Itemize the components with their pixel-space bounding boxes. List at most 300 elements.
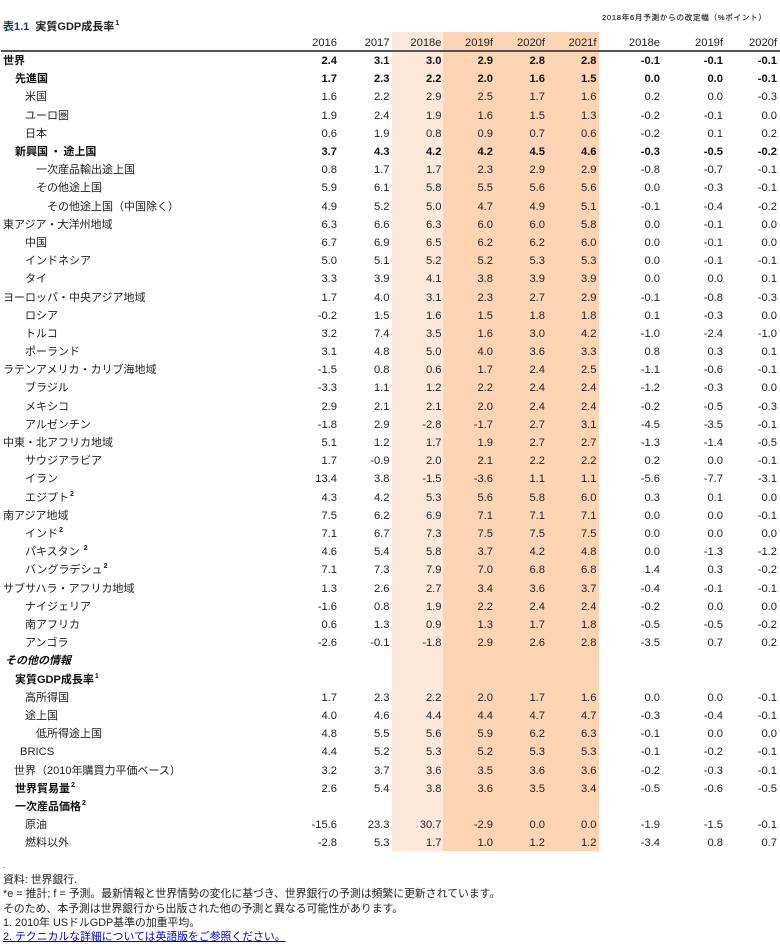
row: 新興国・途上国: 4.3 (374, 146, 390, 158)
row: エジプト: 0.0 (761, 492, 777, 504)
row: 高所得国: 1.7 (529, 692, 545, 704)
row: 世界（2010年購買力平価ベース）: 3.6 (581, 764, 596, 776)
row: ユーロ圏: 2.4 (374, 110, 390, 122)
footnotes (0, 861, 780, 944)
row: 世界貿易量: -0.5 (641, 783, 660, 795)
row: ヨーロッパ・中央アジア地域: 2.7 (529, 292, 545, 304)
row: 中東・北アフリカ地域: -1.4 (704, 437, 723, 449)
row: タイ: 0.1 (761, 273, 777, 285)
row: 一次産品輸出途上国 (36, 164, 777, 176)
row: アルゼンチン: 3.1 (581, 419, 596, 431)
row: BRICS (0, 743, 780, 761)
row: メキシコ: 2.0 (477, 401, 493, 413)
row: サウジアラビア: -0.1 (758, 455, 777, 467)
row: サブサハラ・アフリカ地域: -0.4 (641, 582, 660, 594)
row: アルゼンチン: -1.8 (318, 419, 337, 431)
row: 南アフリカ: 1.3 (374, 619, 390, 631)
subheading: 一次産品価格: 一次産品価格2 (15, 800, 86, 813)
row: エジプト (25, 491, 777, 504)
row: 米国: 0.2 (644, 91, 660, 103)
row: 南アフリカ: 1.3 (477, 619, 493, 631)
row: メキシコ: 2.1 (426, 401, 442, 413)
row: インド: 7.5 (581, 528, 596, 540)
row: パキスタン (25, 545, 777, 558)
row: その他途上国: 5.9 (321, 182, 337, 194)
row: その他途上国（中国除く）: 5.2 (374, 200, 390, 212)
row: BRICS: 4.4 (321, 746, 337, 758)
footnote: 2 link: 2. テクニカルな詳細については英語版をご参照ください。 (3, 931, 286, 943)
row: インド: 0.0 (761, 528, 777, 540)
row: ヨーロッパ・中央アジア地域: -0.3 (758, 292, 777, 304)
row: 途上国: -0.4 (704, 710, 723, 722)
subheading: その他の情報: その他の情報 (5, 655, 71, 667)
row: パキスタン: 0.0 (644, 546, 660, 558)
row: インドネシア (25, 255, 777, 267)
row: 高所得国: -0.1 (758, 692, 777, 704)
row: 南アジア地域: 7.1 (581, 510, 596, 522)
row: ロシア (25, 310, 777, 322)
row: ナイジェリア: -0.2 (641, 601, 660, 613)
row: 東アジア・大洋州地域 (3, 218, 777, 231)
row: インド: インド2 (25, 527, 63, 540)
row: ユーロ圏: -0.1 (704, 110, 723, 122)
row: トルコ: トルコ (25, 328, 58, 340)
row: 燃料以外: -3.4 (641, 837, 660, 849)
row: イラン: -3.6 (474, 473, 493, 485)
row: パキスタン: -1.3 (704, 546, 723, 558)
row: ロシア: 1.8 (581, 310, 596, 322)
row: 南アジア地域: 7.1 (477, 510, 493, 522)
row: アンゴラ (25, 636, 777, 649)
row: ロシア: 1.6 (426, 310, 442, 322)
row: ラテンアメリカ・カリブ海地域: -0.6 (704, 364, 723, 376)
row: ブラジル: -3.3 (318, 382, 337, 394)
row: エジプト: 4.3 (321, 492, 337, 504)
row: 南アフリカ (25, 618, 777, 631)
row: ポーランド (25, 346, 777, 358)
row: その他途上国: 5.6 (529, 182, 545, 194)
row: ヨーロッパ・中央アジア地域: -0.1 (641, 292, 660, 304)
row: 途上国 (25, 710, 777, 722)
row: 世界貿易量: 3.5 (529, 783, 545, 795)
row: その他途上国（中国除く）: 4.7 (477, 200, 493, 212)
column headers: 2018e (629, 37, 660, 49)
row: 高所得国: 高所得国 (25, 692, 69, 704)
row: 原油: 23.3 (368, 819, 390, 831)
row: ヨーロッパ・中央アジア地域 (3, 292, 777, 304)
row: 日本: 1.9 (374, 128, 390, 140)
row: アルゼンチン (25, 418, 777, 431)
row: ブラジル: -0.3 (704, 382, 723, 394)
row: エジプト: 5.3 (426, 492, 442, 504)
row: サブサハラ・アフリカ地域: 3.6 (529, 582, 545, 594)
row: 世界貿易量: -0.6 (704, 783, 723, 795)
row: 世界貿易量: 3.6 (477, 783, 493, 795)
row: 南アフリカ: -0.5 (641, 619, 660, 631)
row: 南アフリカ: 1.8 (581, 619, 596, 631)
row: 世界貿易量: 5.4 (374, 783, 390, 795)
row: インドネシア: 5.0 (321, 255, 337, 267)
row: サウジアラビア: 0.2 (644, 455, 660, 467)
row: ナイジェリア: 2.4 (529, 601, 545, 613)
row: 先進国: 0.0 (644, 73, 660, 85)
row: アルゼンチン: -3.5 (704, 419, 723, 431)
row: パキスタン: 4.6 (321, 546, 337, 558)
row: ナイジェリア: 0.0 (707, 601, 723, 613)
row: 東アジア・大洋州地域: 0.0 (644, 219, 660, 231)
footnote: 1: 1. 2010年 USドルGDP基準の加重平均。 (3, 917, 200, 929)
subheading: 実質GDP成長率: 実質GDP成長率1 (15, 672, 99, 686)
row: BRICS: 5.3 (581, 746, 596, 758)
row: 世界（2010年購買力平価ベース）: -0.3 (704, 764, 723, 776)
row: 世界: 2.8 (529, 55, 545, 67)
row: その他途上国（中国除く）: -0.1 (641, 200, 660, 212)
row: エジプト: 0.1 (707, 492, 723, 504)
row: 中東・北アフリカ地域: 1.7 (426, 437, 442, 449)
row: インド: 7.5 (477, 528, 493, 540)
row: BRICS: -0.1 (641, 746, 660, 758)
row: イラン: -3.1 (758, 473, 777, 485)
row: エジプト: 6.0 (581, 492, 596, 504)
row: イラン: -7.7 (704, 473, 723, 485)
row: ポーランド: 0.8 (644, 346, 660, 358)
row: ナイジェリア: 0.8 (374, 601, 390, 613)
row: 米国: -0.3 (758, 91, 777, 103)
row: 世界（2010年購買力平価ベース）: 3.2 (321, 764, 337, 776)
row: 世界貿易量: 3.8 (426, 783, 442, 795)
row: ラテンアメリカ・カリブ海地域: 2.4 (529, 364, 545, 376)
row: ラテンアメリカ・カリブ海地域: -1.1 (641, 364, 660, 376)
row: 東アジア・大洋州地域: 6.0 (529, 219, 545, 231)
row: 一次産品輸出途上国: 2.9 (581, 164, 596, 176)
row: メキシコ: 2.1 (374, 401, 390, 413)
row: インドネシア: 5.3 (581, 255, 596, 267)
row: インド: 7.1 (321, 528, 337, 540)
row: 低所得途上国: 6.2 (529, 728, 545, 740)
row: 燃料以外: 1.0 (477, 837, 493, 849)
row: 世界: -0.1 (704, 55, 723, 67)
row: 中東・北アフリカ地域: 1.2 (374, 437, 390, 449)
row: 南アジア地域: 0.0 (707, 510, 723, 522)
row: 新興国・途上国: 4.5 (529, 146, 545, 158)
row: メキシコ (25, 401, 777, 413)
row: メキシコ: -0.2 (641, 401, 660, 413)
row: 世界 (3, 54, 777, 67)
row: その他途上国: 5.6 (581, 182, 596, 194)
row: トルコ: 3.2 (321, 328, 337, 340)
row: インドネシア: 5.2 (477, 255, 493, 267)
row: 東アジア・大洋州地域: 6.3 (426, 219, 442, 231)
row: アルゼンチン: -2.8 (422, 419, 442, 431)
row: 先進国: 1.6 (529, 73, 545, 85)
row: ブラジル: 1.1 (374, 382, 390, 394)
row: 日本: -0.2 (641, 128, 660, 140)
row: ユーロ圏: 1.3 (581, 110, 596, 122)
row: 中東・北アフリカ地域: -0.5 (758, 437, 777, 449)
row: バングラデシュ (25, 563, 777, 576)
row: アルゼンチン: 2.7 (529, 419, 545, 431)
row: 原油: 0.0 (581, 819, 596, 831)
row: 東アジア・大洋州地域: 6.0 (477, 219, 493, 231)
row: 高所得国: 0.0 (707, 692, 723, 704)
row: ヨーロッパ・中央アジア地域: 1.7 (321, 292, 337, 304)
row: トルコ: -2.4 (704, 328, 723, 340)
row: トルコ: 7.4 (374, 328, 390, 340)
row: 途上国: 4.6 (374, 710, 390, 722)
row: 高所得国: 2.2 (426, 692, 442, 704)
row: イラン: 1.1 (581, 473, 596, 485)
row: イラン: -5.6 (641, 473, 660, 485)
row: ロシア: 1.5 (374, 310, 390, 322)
row: ロシア: 1.8 (529, 310, 545, 322)
row: 新興国・途上国: 新興国 ・ 途上国 (15, 146, 96, 158)
row: 原油: 30.7 (420, 819, 442, 831)
row: 原油: -15.6 (312, 819, 337, 831)
row: 南アジア地域: 7.5 (321, 510, 337, 522)
row: 途上国: 4.7 (529, 710, 545, 722)
row: エジプト: 4.2 (374, 492, 390, 504)
row: ラテンアメリカ・カリブ海地域: 0.6 (426, 364, 442, 376)
row: サウジアラビア: 2.2 (581, 455, 596, 467)
row: ロシア: -0.3 (704, 310, 723, 322)
row: ラテンアメリカ・カリブ海地域: 1.7 (477, 364, 493, 376)
header rule (1, 50, 780, 52)
row: アンゴラ: -2.6 (318, 637, 337, 649)
row: 南アジア地域: 0.0 (644, 510, 660, 522)
row: 一次産品輸出途上国: 1.7 (426, 164, 442, 176)
row: 南アフリカ: -0.5 (704, 619, 723, 631)
row: その他途上国（中国除く）: -0.4 (704, 200, 723, 212)
column headers: 2019f (695, 37, 723, 49)
row: 中国: 6.2 (477, 237, 493, 249)
row: 先進国 (15, 72, 777, 85)
row: インドネシア: -0.1 (704, 255, 723, 267)
row: 途上国: 4.7 (581, 710, 596, 722)
row: サウジアラビア: 2.2 (529, 455, 545, 467)
row: 世界貿易量: -0.5 (758, 783, 777, 795)
row: 低所得途上国: 4.8 (321, 728, 337, 740)
row: 低所得途上国 (36, 728, 777, 740)
row: その他途上国（中国除く）: 4.9 (321, 200, 337, 212)
row: 世界: 2.4 (321, 55, 337, 67)
row: 燃料以外: 5.3 (374, 837, 390, 849)
row: 南アジア地域: 7.1 (529, 510, 545, 522)
row: 燃料以外 (0, 834, 780, 852)
row: バングラデシュ: 7.1 (321, 564, 337, 576)
row: イラン: イラン (25, 473, 58, 485)
row: ブラジル: -1.2 (641, 382, 660, 394)
row: インド: 0.0 (707, 528, 723, 540)
row: ロシア: -0.2 (318, 310, 337, 322)
row: 世界（2010年購買力平価ベース）: 3.7 (374, 764, 390, 776)
row: 高所得国: 0.0 (644, 692, 660, 704)
row: 高所得国: 2.3 (374, 692, 390, 704)
row: 中東・北アフリカ地域: 2.7 (529, 437, 545, 449)
row: 原油 (0, 816, 780, 834)
row: インドネシア: インドネシア (25, 255, 91, 267)
row: 先進国: 2.3 (374, 73, 390, 85)
row: 燃料以外: 1.2 (529, 837, 545, 849)
row: インドネシア: 0.0 (644, 255, 660, 267)
row: イラン: -1.5 (422, 473, 442, 485)
row: 低所得途上国: -0.1 (641, 728, 660, 740)
row: ポーランド: 0.1 (761, 346, 777, 358)
row: 原油: -1.5 (704, 819, 723, 831)
row: メキシコ: 2.4 (581, 401, 596, 413)
row: 米国: 1.6 (321, 91, 337, 103)
band: 2018e estimate column shading (392, 32, 443, 851)
row: サウジアラビア: 2.0 (426, 455, 442, 467)
row: アンゴラ: -1.8 (422, 637, 442, 649)
row: 世界: 2.8 (581, 55, 596, 67)
row: 南アジア地域 (3, 510, 777, 522)
row: その他途上国（中国除く）: 5.1 (581, 200, 596, 212)
row: 中国: -0.1 (704, 237, 723, 249)
column headers: 2020f (749, 37, 777, 49)
row: 中国: 0.0 (644, 237, 660, 249)
row: 南アジア地域: 6.2 (374, 510, 390, 522)
row: エジプト: 5.6 (477, 492, 493, 504)
row: タイ: 3.3 (321, 273, 337, 285)
row: サウジアラビア: サウジアラビア (25, 455, 102, 467)
row: その他途上国（中国除く）: 5.0 (426, 200, 442, 212)
row: アンゴラ: -3.5 (641, 637, 660, 649)
row: ヨーロッパ・中央アジア地域: -0.8 (704, 292, 723, 304)
row: タイ: 0.0 (707, 273, 723, 285)
row: ラテンアメリカ・カリブ海地域: -0.1 (758, 364, 777, 376)
row: ユーロ圏: 1.9 (321, 110, 337, 122)
row: 米国: 米国 (25, 91, 47, 103)
row: インド (25, 527, 777, 540)
row: 東アジア・大洋州地域: 6.3 (321, 219, 337, 231)
row: ナイジェリア: -1.6 (318, 601, 337, 613)
row: ポーランド: 3.3 (581, 346, 596, 358)
row: その他途上国: 5.5 (477, 182, 493, 194)
row: ポーランド: 0.3 (707, 346, 723, 358)
row: 一次産品輸出途上国: -0.1 (758, 164, 777, 176)
row: 一次産品輸出途上国: -0.8 (641, 164, 660, 176)
row: トルコ: -1.0 (758, 328, 777, 340)
revision column heading: 2018年6月予測からの改定幅（%ポイント） (602, 12, 767, 22)
row: 新興国・途上国: 4.2 (477, 146, 493, 158)
row: 中国 (25, 236, 777, 249)
row: 燃料以外: 0.8 (707, 837, 723, 849)
row: ユーロ圏: 1.5 (529, 110, 545, 122)
row: 世界（2010年購買力平価ベース） (0, 762, 780, 780)
row: ブラジル: 2.4 (529, 382, 545, 394)
row: 先進国: -0.1 (758, 73, 777, 85)
row: 新興国・途上国: 3.7 (321, 146, 337, 158)
row: アンゴラ: 0.2 (761, 637, 777, 649)
row: メキシコ: 2.9 (321, 401, 337, 413)
row: 世界貿易量: 2.6 (321, 783, 337, 795)
row: 米国: 1.6 (581, 91, 596, 103)
row: ロシア: 0.1 (644, 310, 660, 322)
row: 日本: 0.7 (529, 128, 545, 140)
row: ブラジル (25, 382, 777, 394)
row: バングラデシュ: 7.3 (374, 564, 390, 576)
row: トルコ (25, 328, 777, 340)
row: 中国: 6.9 (374, 237, 390, 249)
row: トルコ: 1.6 (477, 328, 493, 340)
row: 南アフリカ: 0.9 (426, 619, 442, 631)
row: 新興国・途上国: -0.5 (704, 146, 723, 158)
row: 東アジア・大洋州地域: 6.6 (374, 219, 390, 231)
row: 南アジア地域: -0.1 (758, 510, 777, 522)
row: サブサハラ・アフリカ地域: 1.3 (321, 582, 337, 594)
row: その他途上国（中国除く） (47, 200, 777, 212)
row: ユーロ圏: ユーロ圏 (25, 110, 69, 122)
row: ブラジル: 0.0 (761, 382, 777, 394)
row: 世界（2010年購買力平価ベース）: 3.5 (477, 764, 493, 776)
row: 南アジア地域: 6.9 (426, 510, 442, 522)
row: 燃料以外: 0.7 (761, 837, 777, 849)
row: バングラデシュ: 0.3 (707, 564, 723, 576)
row: 日本: 0.6 (581, 128, 596, 140)
row: 中国: 6.2 (529, 237, 545, 249)
row: 世界: 3.1 (374, 55, 390, 67)
row: BRICS: -0.2 (704, 746, 723, 758)
row: イラン (25, 473, 777, 485)
row: インドネシア: 5.1 (374, 255, 390, 267)
row: ロシア: 1.5 (477, 310, 493, 322)
row: 途上国: 4.4 (426, 710, 442, 722)
row: ポーランド: 4.8 (374, 346, 390, 358)
row: ポーランド: 3.6 (529, 346, 545, 358)
row: 新興国・途上国: 4.6 (581, 146, 596, 158)
row: BRICS: 5.2 (374, 746, 390, 758)
row: メキシコ: 2.4 (529, 401, 545, 413)
row: 低所得途上国: 0.0 (761, 728, 777, 740)
row: サブサハラ・アフリカ地域: -0.1 (704, 582, 723, 594)
row: 世界: 2.9 (477, 55, 493, 67)
row: ヨーロッパ・中央アジア地域: 3.1 (426, 292, 442, 304)
row: ユーロ圏: -0.2 (641, 110, 660, 122)
row: 世界: 3.0 (426, 55, 442, 67)
row: 新興国・途上国 (15, 146, 777, 158)
title: 表1.1 実質GDP成長率1 (3, 20, 119, 33)
row: その他途上国: 0.0 (644, 182, 660, 194)
column headers: 2016 (312, 37, 337, 49)
row: ラテンアメリカ・カリブ海地域: -1.5 (318, 364, 337, 376)
column headers: 2018e (410, 37, 442, 49)
row: サウジアラビア: 1.7 (321, 455, 337, 467)
row: イラン: 3.8 (374, 473, 390, 485)
row: 低所得途上国: 低所得途上国 (36, 728, 102, 740)
row: ポーランド: 4.0 (477, 346, 493, 358)
row: サブサハラ・アフリカ地域: 3.4 (477, 582, 493, 594)
band: 2019f-2021f forecast columns shading (443, 32, 598, 851)
row: 高所得国 (25, 692, 777, 704)
row: パキスタン: 4.8 (581, 546, 596, 558)
row: 中東・北アフリカ地域: 中東・北アフリカ地域 (3, 437, 113, 449)
row: 世界貿易量: 世界貿易量2 (15, 782, 75, 795)
row: タイ: 4.1 (426, 273, 442, 285)
row: ポーランド: ポーランド (25, 346, 80, 358)
row: タイ (25, 273, 777, 285)
row: 南アフリカ: 南アフリカ (25, 619, 80, 631)
row: 世界（2010年購買力平価ベース）: 3.6 (426, 764, 442, 776)
row: 米国: 1.7 (529, 91, 545, 103)
row: 途上国: 4.0 (321, 710, 337, 722)
row: タイ: タイ (25, 273, 47, 285)
row: 途上国: 途上国 (25, 710, 58, 722)
row: 中国: 6.5 (426, 237, 442, 249)
row: 先進国: 1.5 (581, 73, 596, 85)
column headers: 2020f (517, 37, 545, 49)
row: 先進国: 2.2 (426, 73, 442, 85)
row: 新興国・途上国: 4.2 (426, 146, 442, 158)
